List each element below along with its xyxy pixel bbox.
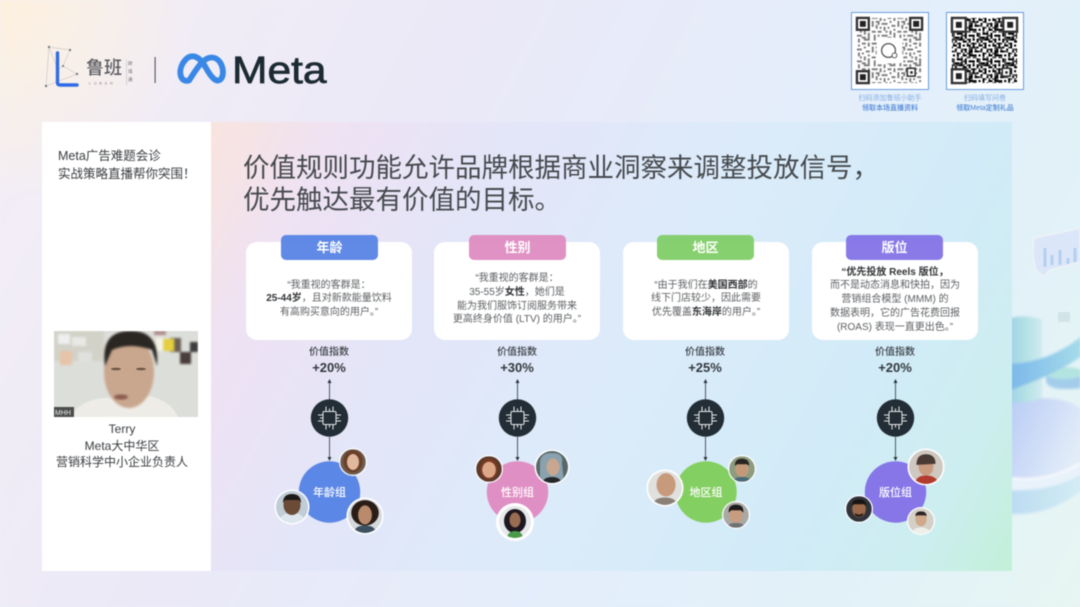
pill: gender: 性别 [504, 240, 530, 255]
avatar [646, 469, 684, 507]
avatar [728, 455, 756, 483]
quote: age: “我重视的客群是： [287, 280, 371, 290]
avatar [274, 490, 310, 524]
logo: Luban: 鲁班 [86, 58, 122, 78]
card: placement [812, 242, 978, 340]
sidebar heading: Meta广告难题会诊 [58, 149, 161, 163]
quote: placement: “优先投放 Reels 版位， [841, 266, 949, 278]
flow: region [646, 378, 756, 530]
quote: placement: 营销组合模型 (MMM) 的 [841, 294, 949, 305]
speaker caption [56, 422, 188, 469]
slide title [243, 153, 879, 215]
pill: placement: 版位 [881, 240, 908, 255]
quote: gender: 更高终身价值 (LTV) 的用户。” [453, 314, 581, 325]
quote: gender: “我重视的客群是： [475, 273, 559, 284]
value index: gender: 价值指数 [497, 347, 537, 358]
avatar [722, 501, 750, 529]
arrows and chip icon [311, 379, 348, 461]
group bubble: 地区组 [690, 485, 722, 499]
QR caption: survey [956, 94, 1014, 112]
QR caption: assistant [858, 94, 922, 112]
quote: age [266, 278, 392, 318]
group bubble [299, 461, 360, 523]
quote: region: “由于我们在美国西部的 [654, 280, 758, 290]
group bubble [865, 461, 926, 523]
slide panel [211, 122, 1012, 571]
quote: placement: 数据表明，它的广告花费回报 [830, 308, 960, 319]
value index: region: +25% [688, 360, 722, 375]
avatar [339, 448, 367, 476]
speaker caption: 营销科学中小企业负责人 [56, 455, 188, 469]
value index: region [684, 346, 726, 375]
flow: gender [474, 378, 570, 542]
quote: age: 有高购买意向的用户。” [280, 307, 378, 318]
QR caption: survey: 领取Meta定制礼品 [956, 105, 1014, 112]
value index: region: 价值指数 [685, 347, 725, 358]
avatar [907, 507, 935, 535]
speaker webcam video: MHH [55, 410, 71, 417]
logo: Luban: 通 [128, 76, 133, 83]
avatar [845, 495, 873, 523]
avatar [534, 450, 570, 484]
value index: age [308, 346, 350, 375]
arrows and chip icon [499, 379, 536, 461]
quote: placement: (ROAS) 表现一直更出色。” [837, 322, 953, 333]
pill: region: 地区 [692, 240, 718, 255]
quote: age: 25-44岁，且对新款能量饮料 [266, 293, 392, 304]
group bubble [675, 461, 737, 523]
value index: gender [496, 346, 538, 375]
card: gender [434, 242, 600, 340]
slide title: 优先触达最有价值的目标。 [243, 185, 561, 215]
card: age [246, 242, 412, 340]
value index: gender: +30% [500, 360, 534, 375]
quote: region [651, 278, 761, 318]
logo: Luban [44, 45, 133, 88]
sidebar panel [42, 122, 211, 571]
pill: age: 年龄 [316, 240, 342, 255]
flow: age [274, 378, 384, 535]
value index: placement: +20% [878, 360, 912, 375]
speaker caption: Meta大中华区 [85, 438, 159, 452]
arrows and chip icon [877, 379, 914, 461]
quote: region: 线下门店较少，因此需要 [651, 293, 761, 304]
quote: gender: 35-55岁女性，她们是 [469, 287, 565, 298]
slide title: 价值规则功能允许品牌根据商业洞察来调整投放信号， [243, 153, 879, 183]
QR code: assistant [851, 12, 929, 90]
QR code: survey [946, 12, 1024, 90]
logo: Luban: 境 [128, 68, 133, 75]
avatar [907, 448, 945, 486]
group bubble: 年龄组 [313, 485, 346, 499]
QR caption: assistant: 领取本场直播资料 [862, 105, 918, 112]
speaker caption: Terry [109, 422, 135, 436]
logo: Luban: 跨 [128, 60, 133, 67]
card: region [623, 242, 789, 340]
pill: placement [846, 235, 943, 260]
speaker webcam video [53, 330, 199, 418]
QR caption: survey: 扫码填写问卷 [964, 95, 1006, 102]
value index: age: 价值指数 [309, 347, 349, 358]
value index: placement: 价值指数 [875, 347, 915, 358]
logo: Meta [154, 50, 328, 88]
quote: placement [830, 265, 960, 333]
QR caption: assistant: 扫码添加鲁班小助手 [858, 95, 922, 102]
sidebar heading: 实战策略直播帮你突围！ [58, 167, 196, 181]
sidebar heading [58, 148, 196, 181]
flow: placement [844, 378, 945, 536]
group bubble: 版位组 [879, 485, 912, 499]
value index: placement [874, 346, 916, 375]
pill: region [657, 235, 754, 260]
avatar [496, 503, 534, 541]
3D decoration on right [1011, 228, 1080, 515]
avatar [475, 455, 503, 483]
avatar [346, 497, 384, 535]
value index: age: +20% [312, 360, 346, 375]
quote: gender: 能为我们服饰订阅服务带来 [457, 301, 577, 312]
group bubble [487, 461, 548, 523]
quote: gender [453, 272, 582, 325]
quote: placement: 而不是动态消息和快拍，因为 [830, 280, 960, 291]
group bubble: 性别组 [501, 485, 534, 499]
quote: region: 优先覆盖东海岸的用户。” [652, 307, 760, 318]
arrows and chip icon [687, 379, 724, 461]
logo: Luban: LUBAN [89, 82, 116, 86]
pill: gender [469, 235, 566, 260]
pill: age [281, 235, 378, 260]
